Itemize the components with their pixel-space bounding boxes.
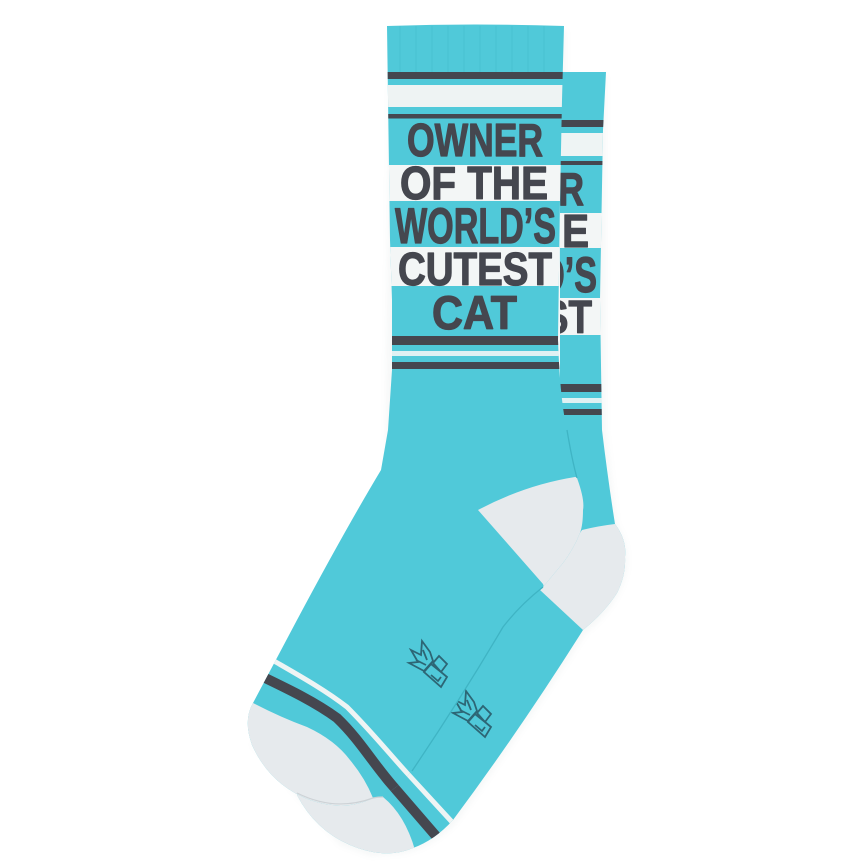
toe stripes <box>264 660 410 791</box>
back sock logo <box>453 691 491 737</box>
slogan: CAT <box>432 286 517 339</box>
back sock toe stripes <box>390 772 454 838</box>
slogan: WORLD’S <box>395 198 556 254</box>
front sock logo <box>409 641 447 687</box>
cuff stripes <box>380 72 570 369</box>
back sock slogan: WORLD’S <box>436 247 597 303</box>
slogan <box>395 114 556 339</box>
back sock slogan: OF THE <box>441 205 589 257</box>
toe <box>248 703 373 806</box>
heel <box>478 477 584 586</box>
illustration: pair of socks <box>248 24 626 854</box>
soft shadow <box>252 30 628 856</box>
back sock slogan: OWNER <box>448 163 584 215</box>
seam between socks <box>412 430 577 771</box>
slogan: CUTEST <box>398 243 552 295</box>
back sock heel <box>540 524 626 630</box>
back sock slogan <box>560 172 596 334</box>
cuff ribs <box>400 26 544 72</box>
back sock <box>297 72 626 854</box>
slogan: OF THE <box>400 157 548 209</box>
back sock cuff stripes <box>560 120 604 415</box>
back sock toe <box>297 794 414 854</box>
toe seam <box>297 793 383 804</box>
front sock <box>248 24 584 806</box>
slogan: OWNER <box>407 114 543 166</box>
back sock slogan: CUTEST <box>438 291 592 343</box>
